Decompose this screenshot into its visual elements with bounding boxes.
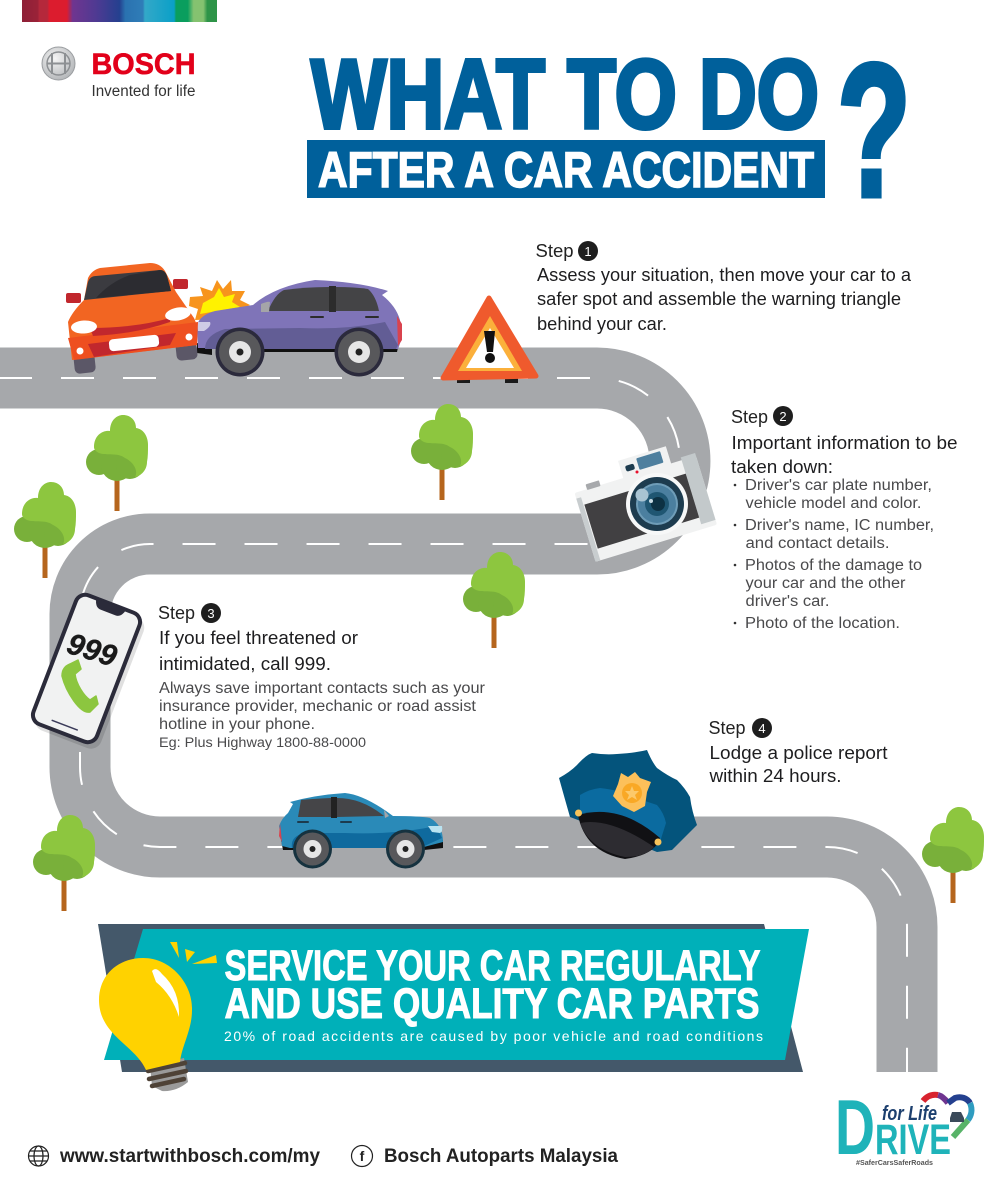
banner: service reminder: 20% of road accidents are caused by poor vehicle and road conditions	[224, 1028, 763, 1044]
bullet list: driver's car.	[746, 593, 830, 610]
step 4 text: within 24 hours.	[708, 766, 842, 786]
footer: facebook: f	[360, 1148, 365, 1164]
tree	[463, 552, 525, 648]
step 3 text	[158, 603, 485, 750]
bullet list: Driver's car plate number,	[745, 477, 932, 494]
step 3 text: intimidated, call 999.	[159, 654, 331, 674]
badge	[613, 772, 651, 812]
step 1 text	[536, 241, 912, 334]
step 1 text: safer spot and assemble the warning triangle	[537, 289, 901, 309]
banner: service reminder: AND USE QUALITY CAR PARTS	[224, 980, 760, 1028]
banner: service reminder	[98, 924, 809, 1091]
car: blue	[279, 793, 443, 868]
step 3 text: Always save important contacts such as your	[159, 680, 485, 697]
bullet list: vehicle model and color.	[746, 495, 922, 512]
bullet list: Photo of the location.	[745, 615, 900, 632]
step 3 text: 3	[207, 606, 215, 621]
icon: warning triangle	[443, 298, 536, 383]
bullet list	[734, 477, 934, 632]
tree	[922, 807, 984, 903]
icon: light bulb	[99, 942, 217, 1091]
step 3 text: Step	[158, 603, 195, 623]
tree	[411, 404, 473, 500]
top colour bar	[22, 0, 217, 22]
title: ?	[837, 25, 911, 237]
step 3 text: Eg: Plus Highway 1800-88-0000	[159, 735, 366, 750]
bullet list: and contact details.	[746, 535, 890, 552]
title	[307, 25, 911, 237]
icon: phone	[28, 592, 149, 752]
icon: police hat	[559, 750, 697, 859]
road	[0, 378, 907, 1072]
bullet list: Driver's name, IC number,	[745, 517, 934, 534]
logo: Bosch: Invented for life	[92, 83, 196, 100]
step 2 text: Important information to be	[732, 433, 958, 453]
logo: Bosch	[42, 47, 196, 100]
tree	[14, 482, 76, 578]
step 2 text: 2	[779, 409, 787, 424]
step 2 text: taken down:	[731, 457, 833, 477]
step 1 text: 1	[584, 244, 592, 259]
footer: website: www.startwithbosch.com/my	[59, 1146, 320, 1167]
footer: facebook: Bosch Autoparts Malaysia	[384, 1146, 618, 1167]
step 1 text: Step	[536, 241, 574, 261]
logo: Drive for Life	[835, 1083, 971, 1171]
title: WHAT TO DO	[311, 39, 819, 149]
logo: Drive for Life: RIVE	[875, 1116, 951, 1164]
step 2 text: Step	[731, 407, 768, 427]
logo: Drive for Life: for Life	[882, 1103, 937, 1125]
logo: Drive for Life: D	[835, 1083, 875, 1171]
step 4 text	[708, 718, 888, 786]
title: AFTER A CAR ACCIDENT	[318, 142, 814, 198]
step 1 text: Assess your situation, then move your car to a	[537, 265, 912, 285]
bullet list: Photos of the damage to	[745, 557, 922, 574]
logo: Bosch: BOSCH	[92, 48, 196, 81]
icon: phone: 999	[63, 627, 121, 674]
bullet list: your car and the other	[746, 575, 906, 592]
car: orange	[66, 263, 198, 374]
tree	[86, 415, 148, 511]
step 3 text: hotline in your phone.	[159, 716, 315, 733]
step 4 text: Step	[708, 718, 746, 738]
step 3 text: If you feel threatened or	[159, 628, 358, 648]
step 3 text: insurance provider, mechanic or road assist	[159, 698, 477, 715]
banner: service reminder: SERVICE YOUR CAR REGULARLY	[224, 942, 760, 990]
step 4 text: Lodge a police report	[710, 743, 888, 763]
step 1 text: behind your car.	[537, 314, 667, 334]
step 2 text	[731, 406, 958, 632]
step 4 text: 4	[758, 721, 766, 736]
tree	[33, 815, 95, 911]
logo: Drive for Life: #SaferCarsSaferRoads	[856, 1158, 933, 1167]
collision burst	[189, 280, 250, 320]
car: purple	[197, 280, 402, 376]
icon: camera	[569, 439, 717, 562]
